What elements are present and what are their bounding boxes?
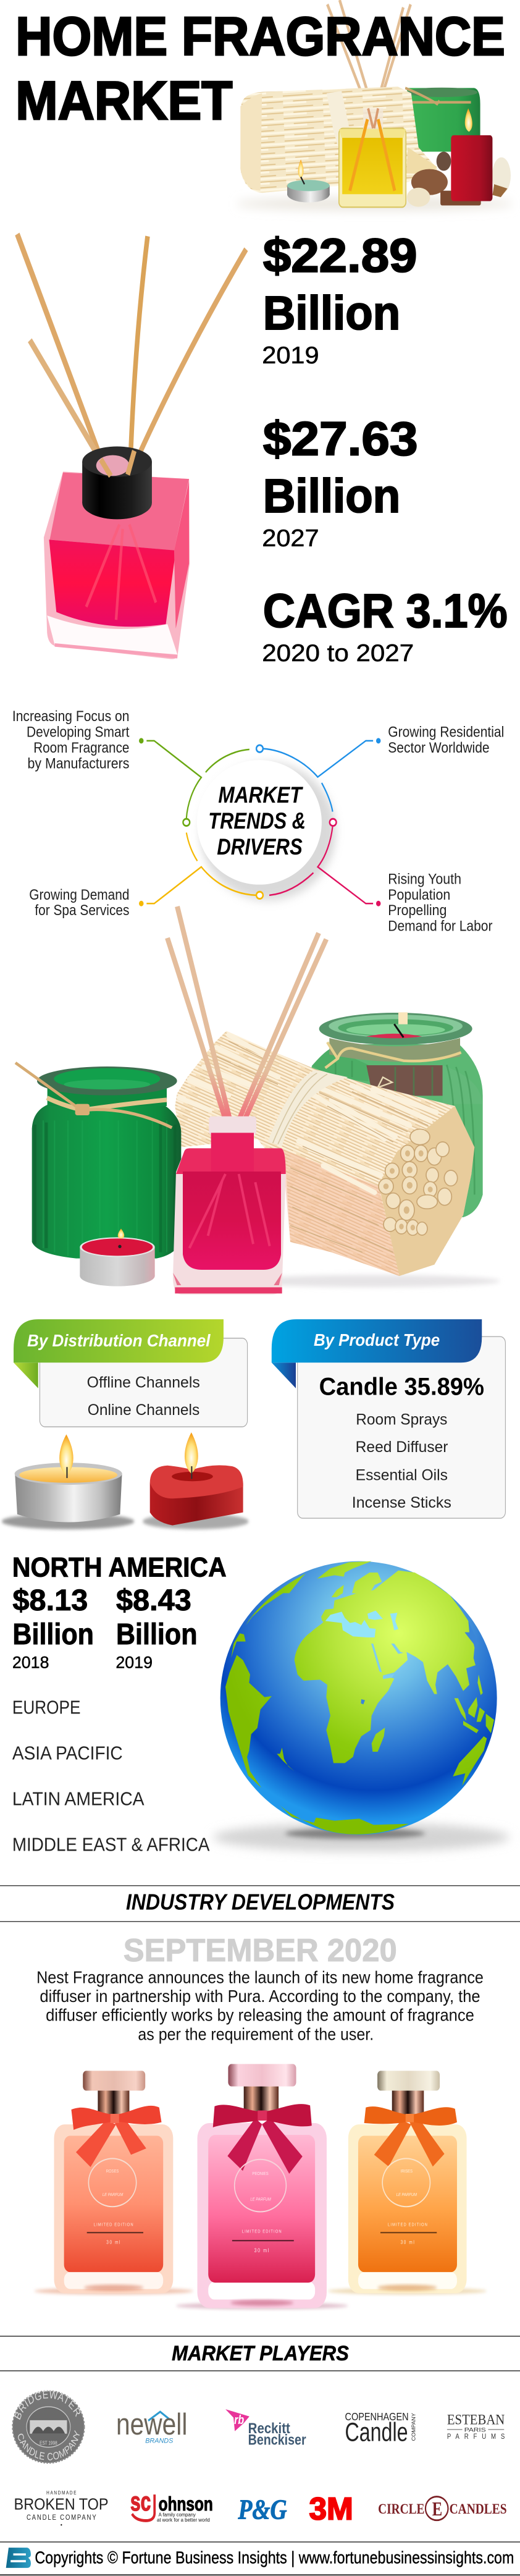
panel: by distribution channel: Online Channels	[88, 1401, 199, 1418]
image: rose perfume bottle: ROSES	[106, 2169, 119, 2174]
stat: 2019 market value: Billion	[263, 287, 400, 340]
driver: smart room fragrance: Room Fragrance	[33, 739, 129, 756]
list: other regions: EUROPE	[12, 1696, 80, 1718]
driver: youth population: Demand for Labor	[388, 918, 492, 934]
driver: spa services	[29, 832, 263, 918]
image: rose perfume bottle: LIMITED EDITION	[94, 2223, 134, 2228]
list: other regions: LATIN AMERICA	[12, 1788, 145, 1809]
logo: 3m: 3M	[309, 2491, 353, 2526]
stat: 2019 market value: $22.89	[263, 229, 417, 282]
icon: tin candle	[2, 1434, 134, 1529]
heading: north america values: NORTH AMERICA	[12, 1552, 227, 1582]
logo: circle e candles: CIRCLE	[378, 2501, 424, 2517]
tea light	[80, 1228, 155, 1286]
driver: smart room fragrance: Increasing Focus on	[12, 707, 129, 724]
logo: broken top candle company: HANDMADE	[46, 2489, 77, 2496]
stat: 2019 market value	[262, 229, 417, 369]
image: peony perfume bottle: PEONIES	[252, 2171, 269, 2176]
image: iris perfume bottle: IRISES	[401, 2169, 413, 2174]
title: MARKET	[15, 70, 232, 131]
driver: smart room fragrance: by Manufacturers	[28, 755, 130, 772]
panel: industry development detail and market players	[12, 1932, 507, 2526]
panel: by product type: Essential Oils	[356, 1466, 448, 1484]
driver: residential sector	[256, 724, 504, 812]
footer	[6, 2548, 514, 2568]
logo: sc johnson: A family company	[159, 2512, 196, 2518]
panel: by distribution channel: By Distribution Channel	[27, 1332, 211, 1351]
image: iris perfume bottle: LE PARFUM	[396, 2193, 417, 2197]
image: iris perfume bottle: LIMITED EDITION	[388, 2223, 428, 2228]
logo: reckitt benckiser: Benckiser	[248, 2431, 306, 2448]
logo: newell brands: newell	[116, 2408, 187, 2441]
panel: by product type: By Product Type	[314, 1331, 440, 1349]
panel: by product type	[272, 1319, 505, 1518]
text block: announcement	[36, 1968, 484, 2044]
panel: by product type: Room Sprays	[356, 1411, 447, 1428]
logo: broken top candle company	[14, 2489, 109, 2526]
stat: CAGR: 2020 to 2027	[262, 640, 414, 667]
driver: youth population: Propelling	[388, 902, 447, 918]
heading: north america values: Billion	[12, 1618, 94, 1651]
stat: CAGR	[262, 584, 508, 667]
heading: north america values: $8.13	[12, 1584, 88, 1617]
right green jar	[245, 1012, 500, 1287]
image: iris perfume bottle: 30 ml	[401, 2239, 415, 2245]
heading: north america values: 2018	[12, 1654, 49, 1672]
title	[15, 6, 505, 131]
footer copyright text: Copyrights © Fortune Business Insights | www.fortunebusinessinsights.com	[35, 2548, 514, 2567]
driver: spa services: Growing Demand	[29, 886, 129, 903]
text block: announcement: as per the requirement of the user.	[138, 2025, 374, 2044]
heading: north america values: $8.43	[116, 1584, 191, 1617]
list: other regions: ASIA PACIFIC	[12, 1742, 123, 1763]
image: peony perfume bottle	[176, 2064, 348, 2309]
logo: sc johnson: sc	[130, 2488, 151, 2517]
left green jar and twine	[15, 1063, 181, 1259]
heading: market trends and drivers: TRENDS &	[208, 809, 306, 834]
heading: market trends and drivers: DRIVERS	[217, 835, 303, 860]
logo: sc johnson	[130, 2488, 213, 2523]
logo: newell brands: BRANDS	[145, 2438, 174, 2445]
heading: north america values	[12, 1552, 227, 1672]
logo: copenhagen candle: COMPANY	[411, 2413, 416, 2441]
driver: residential sector: Sector Worldwide	[388, 739, 490, 756]
image: rose perfume bottle: LE PARFUM	[103, 2193, 124, 2197]
heading: industry developments: INDUSTRY DEVELOPMENTS	[126, 1890, 395, 1914]
driver: smart room fragrance	[12, 707, 250, 826]
panel: by product type: Incense Sticks	[352, 1493, 451, 1511]
heading: september 2020: SEPTEMBER 2020	[124, 1932, 397, 1968]
heading: north america values: Billion	[116, 1618, 198, 1651]
logo: circle e candles: E	[432, 2499, 442, 2520]
stat: 2027 market value: Billion	[263, 470, 400, 523]
stat: 2027 market value	[262, 412, 418, 552]
heading: market trends and drivers: MARKET	[218, 783, 304, 808]
logo: reckitt benckiser: rb	[234, 2412, 244, 2426]
logo: bridgewater	[12, 2390, 85, 2464]
icon: globe	[213, 1561, 510, 1852]
panel: by product type: Candle 35.89%	[319, 1373, 484, 1400]
logo: esteban parfums: PARIS	[464, 2426, 486, 2433]
image: rose perfume bottle: 30 ml	[106, 2239, 121, 2245]
text block: announcement: diffuser efficiently works by releasing the amount of fragrance	[46, 2006, 474, 2025]
pink diffuser bottle	[173, 1117, 286, 1294]
image: reed diffuser still life	[235, 0, 514, 210]
list: other regions	[12, 1696, 210, 1855]
heading: north america values: 2019	[115, 1654, 153, 1672]
logo: bridgewater: EST 1998	[40, 2440, 57, 2446]
logo: broken top candle company: CANDLE COMPANY	[27, 2514, 96, 2522]
text block: announcement: Nest Fragrance announces the launch of its new home fragrance	[36, 1968, 484, 1987]
driver: spa services: for Spa Services	[35, 902, 130, 918]
dividers around market players and footer	[0, 2336, 520, 2575]
logo: circle e candles	[378, 2496, 507, 2520]
logo: reckitt benckiser	[225, 2409, 306, 2448]
image: pink reed diffuser bottle	[17, 234, 246, 659]
heading: market trends and drivers	[208, 783, 306, 860]
logo: broken top candle company: BROKEN TOP	[14, 2495, 109, 2513]
image: rose perfume bottle	[34, 2071, 193, 2294]
text block: announcement: diffuser in partnership with Pura. According to the company, the	[40, 1987, 480, 2006]
panel: by distribution channel: Offline Channels	[87, 1374, 200, 1391]
driver: youth population: Population	[388, 886, 450, 903]
icon: red heart candle	[143, 1432, 249, 1529]
image: peony perfume bottle: 30 ml	[254, 2247, 270, 2253]
image: peony perfume bottle: LIMITED EDITION	[242, 2229, 282, 2234]
driver: youth population: Rising Youth	[388, 871, 461, 887]
logo: bridgewater: BRIDGEWATER	[14, 2390, 80, 2420]
logo: esteban parfums	[447, 2412, 505, 2441]
diffuser reeds	[167, 906, 326, 1123]
stat: 2027 market value: 2027	[262, 525, 319, 552]
logo: esteban parfums: ESTEBAN	[447, 2412, 505, 2428]
logo: circle e candles: CANDLES	[450, 2501, 507, 2517]
panel: segments and regions	[2, 1319, 505, 1855]
stat: 2019 market value: 2019	[262, 342, 319, 369]
raffia bundle	[175, 1031, 474, 1276]
logo: sc johnson: ohnson	[159, 2493, 213, 2515]
panel: by product type: Reed Diffuser	[356, 1438, 448, 1455]
logo: copenhagen candle: Candle	[345, 2418, 408, 2447]
image: candle jars with reeds and pink diffuser	[15, 906, 500, 1294]
center circle	[197, 760, 336, 900]
image: peony perfume bottle: LE PARFUM	[250, 2197, 271, 2202]
stat: 2027 market value: $27.63	[263, 412, 418, 465]
list: other regions: MIDDLE EAST & AFRICA	[12, 1833, 210, 1855]
driver: youth population	[269, 819, 492, 934]
logo: sc johnson: at work for a better world	[157, 2517, 210, 2523]
logo: esteban parfums: PARFUMS	[447, 2433, 505, 2441]
logo: reckitt benckiser: Reckitt	[248, 2420, 290, 2437]
stat: CAGR: CAGR 3.1%	[263, 584, 508, 638]
title: HOME FRAGRANCE	[15, 6, 505, 67]
logo: bridgewater: CANDLE COMPANY	[18, 2430, 80, 2460]
driver: residential sector: Growing Residential	[388, 724, 504, 740]
heading: market players: MARKET PLAYERS	[172, 2341, 349, 2365]
logo: copenhagen candle: COPENHAGEN	[345, 2411, 409, 2423]
image: iris perfume bottle	[328, 2071, 487, 2294]
panel: market trends and drivers	[12, 707, 504, 934]
panel: by distribution channel	[14, 1319, 248, 1427]
icon: fortune business insights logo	[6, 2548, 31, 2568]
logo: p and g: P&G	[238, 2494, 287, 2525]
panel: header and key figures	[15, 0, 514, 667]
driver: smart room fragrance: Developing Smart	[27, 724, 129, 740]
